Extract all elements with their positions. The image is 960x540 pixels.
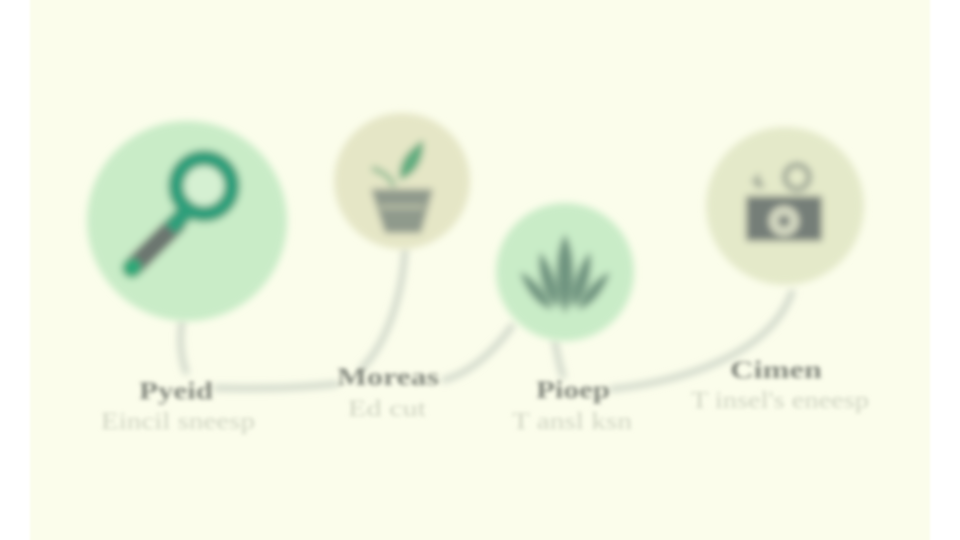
icon: potted plant [371, 140, 433, 233]
step 3: leaf circle and agave icon [496, 203, 634, 341]
icon: camera [746, 165, 822, 241]
label: step 3 [512, 377, 632, 435]
label: step 3: T ansl ksn [512, 409, 632, 435]
step labels [101, 357, 869, 435]
label: step 2 [337, 364, 439, 421]
label: step 4 [691, 357, 869, 414]
label: step 2: Ed cut [348, 396, 427, 421]
label: step 4: Cimen [730, 357, 822, 384]
connector lines [181, 250, 792, 389]
label: step 4: T insel's eneesp [691, 388, 869, 414]
label: step 2: Moreas [337, 364, 439, 391]
step 1: search circle and magnifier icon [87, 121, 287, 321]
step 4: camera circle and icon [706, 127, 864, 285]
label: step 1 [101, 378, 255, 435]
label: step 1: Pyeid [139, 378, 213, 405]
label: step 1: Eincil sneesp [101, 409, 255, 435]
label: step 3: Pioep [536, 377, 610, 404]
step 2: plant circle and pot icon [334, 113, 470, 249]
icon: spiky plant [520, 234, 610, 314]
icon: magnifying glass [122, 158, 232, 278]
